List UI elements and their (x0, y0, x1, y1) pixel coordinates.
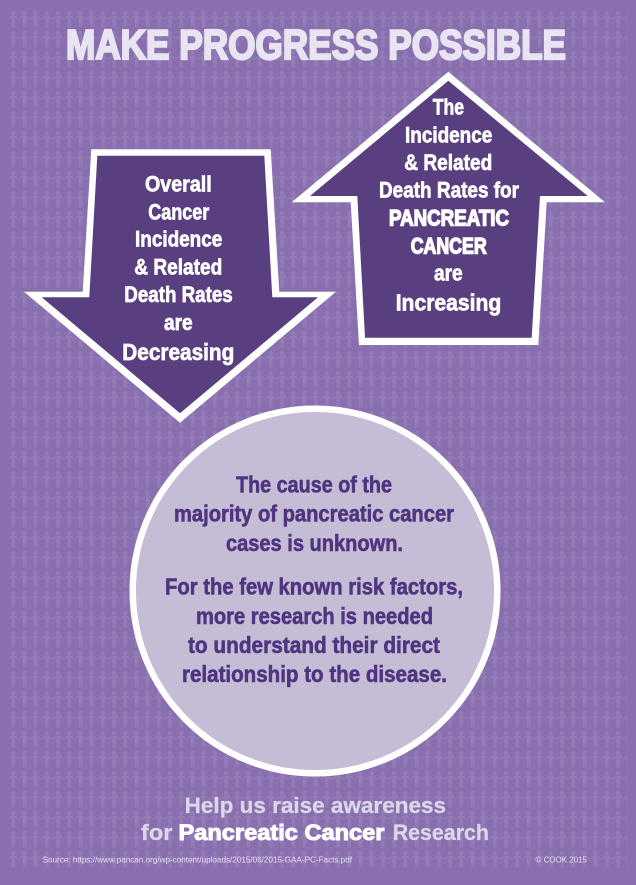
arrow text: overall cancer: Decreasing (122, 339, 234, 365)
arrow text: overall cancer: are (164, 310, 193, 335)
text block: risk factors: more research is needed (196, 603, 433, 629)
arrow text: overall cancer: Cancer (148, 199, 210, 224)
panel: circle callout (133, 409, 497, 773)
arrow text: pancreatic cancer: & Related (404, 150, 492, 175)
text block: risk factors (165, 573, 463, 687)
call to action: Pancreatic Cancer (178, 820, 385, 845)
call to action (141, 793, 489, 845)
text block: cause unknown (174, 472, 454, 556)
call to action: Help us raise awareness (185, 793, 446, 818)
text block: risk factors: to understand their direct (188, 632, 440, 658)
copyright: © COOK 2015 (536, 856, 588, 865)
text block: cause unknown: majority of pancreatic cancer (174, 501, 454, 527)
arrow text: overall cancer: & Related (134, 254, 222, 279)
circle background (133, 409, 497, 773)
arrow text: pancreatic cancer: The (433, 94, 464, 119)
call to action: for (141, 820, 173, 845)
source note: Source: https://www.pancan.org/wp-content/uploads/2015/06/2015-GAA-PC-Facts.pdf (43, 856, 353, 865)
arrow text: overall cancer (122, 172, 234, 365)
arrow text: pancreatic cancer: Increasing (396, 290, 501, 316)
arrow panel: overall cancer decreasing (24, 149, 336, 423)
text block: risk factors: relationship to the disease. (182, 661, 447, 687)
text block: cause unknown: The cause of the (236, 472, 392, 498)
arrow text: pancreatic cancer: Death Rates for (379, 177, 519, 202)
text block: cause unknown: cases is unknown. (226, 530, 403, 556)
arrow text: pancreatic cancer: are (434, 261, 463, 286)
call to action: Research (393, 820, 489, 845)
text block: risk factors: For the few known risk factors, (165, 573, 463, 599)
arrow panel: pancreatic cancer increasing (292, 72, 605, 345)
arrow text: pancreatic cancer: Incidence (405, 122, 492, 147)
arrow text: overall cancer: Incidence (135, 227, 222, 252)
arrow text: pancreatic cancer: PANCREATIC (389, 205, 509, 230)
arrow text: pancreatic cancer: CANCER (411, 233, 487, 258)
arrow text: pancreatic cancer (379, 94, 519, 316)
arrow text: overall cancer: Overall (145, 172, 212, 197)
arrow text: overall cancer: Death Rates (124, 282, 233, 307)
icon: up arrow (292, 72, 605, 345)
icon: down arrow (24, 149, 336, 423)
